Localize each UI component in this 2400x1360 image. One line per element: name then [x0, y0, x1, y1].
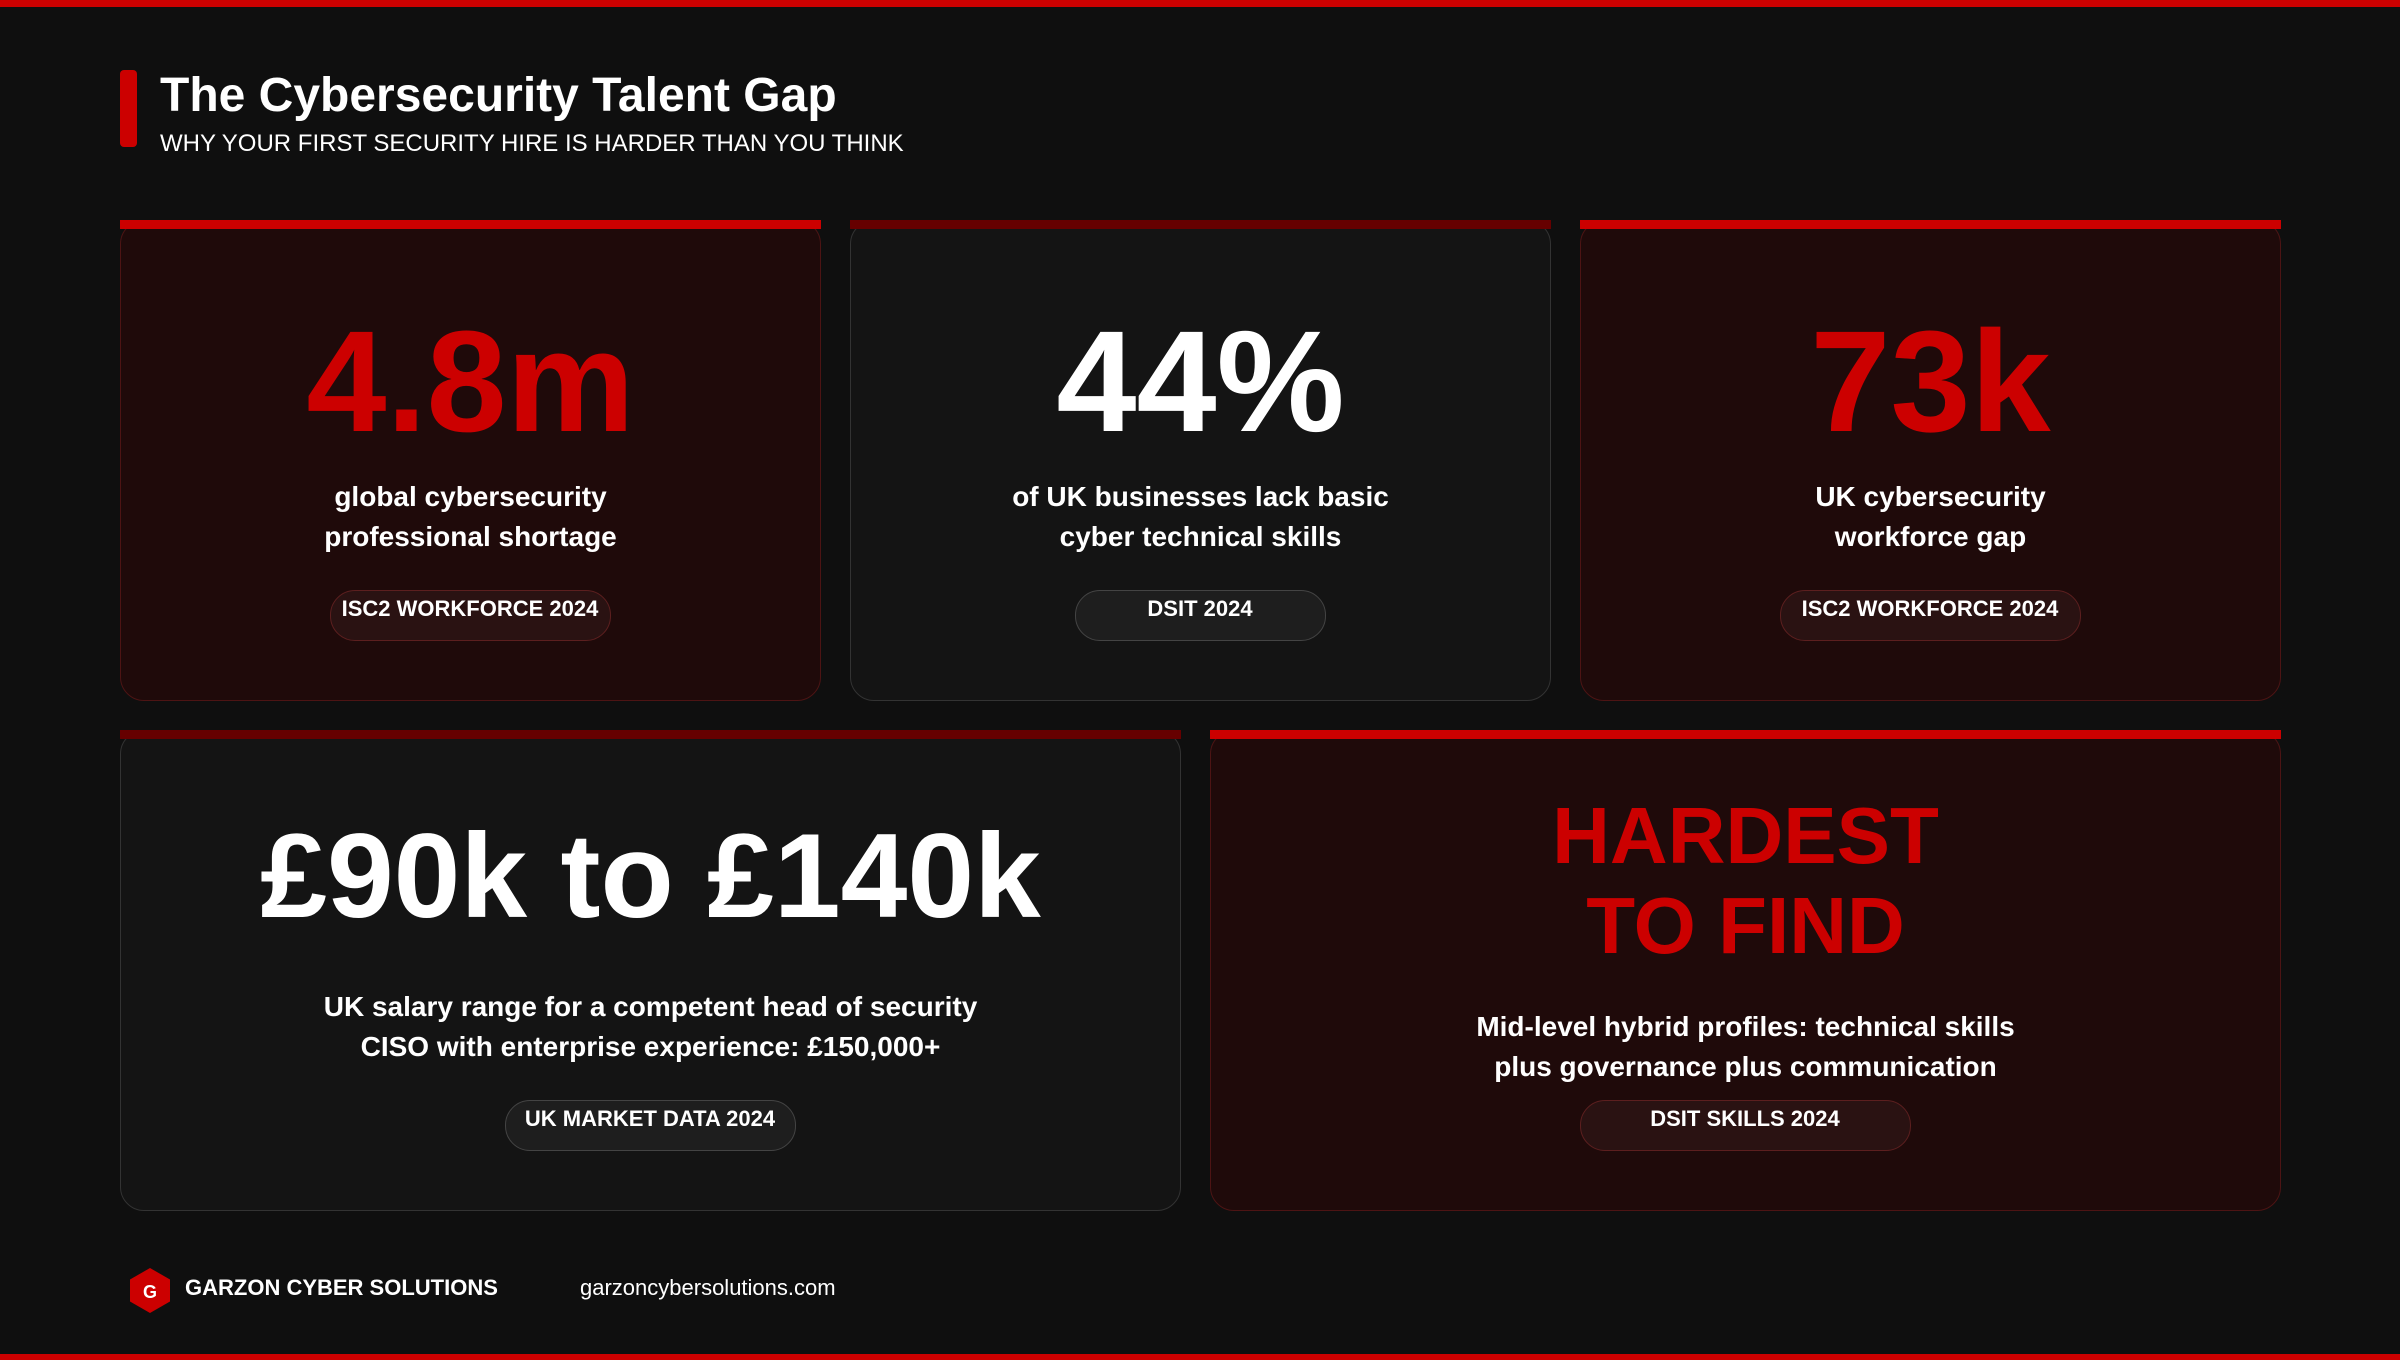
source pill — [1780, 590, 2081, 641]
description: professional shortage — [324, 521, 617, 552]
headline: HARDEST — [1552, 791, 1939, 880]
source pill — [1075, 590, 1326, 641]
panel: salary range — [120, 730, 1181, 1211]
title: The Cybersecurity Talent Gap — [160, 69, 837, 122]
description: global cybersecurity — [334, 481, 607, 512]
source pill: DSIT SKILLS 2024 — [1650, 1106, 1840, 1131]
headline — [1552, 791, 1939, 970]
panel: UK skills — [850, 220, 1551, 701]
panel top bar — [1580, 220, 2281, 229]
description: of UK businesses lack basic — [1012, 481, 1389, 512]
footer — [130, 1268, 836, 1313]
description: UK cybersecurity — [1815, 481, 2046, 512]
source pill: ISC2 WORKFORCE 2024 — [1802, 596, 2058, 621]
description — [324, 481, 617, 552]
icon: hexagon logo — [130, 1268, 170, 1313]
panel top bar — [1210, 730, 2281, 739]
panel top bar — [120, 220, 821, 229]
header — [120, 69, 904, 157]
stat: salary: £90k to £140k — [260, 809, 1041, 943]
panel: global shortage — [120, 220, 821, 701]
website: garzoncybersolutions.com — [580, 1275, 836, 1300]
description — [1012, 481, 1389, 552]
subtitle: WHY YOUR FIRST SECURITY HIRE IS HARDER THAN YOU THINK — [160, 130, 904, 157]
icon: hexagon logo: G — [143, 1282, 157, 1302]
description — [324, 991, 978, 1062]
description: CISO with enterprise experience: £150,000+ — [361, 1031, 940, 1062]
description — [1476, 1011, 2015, 1082]
header accent block — [120, 70, 137, 147]
description: plus governance plus communication — [1494, 1051, 1997, 1082]
description: Mid-level hybrid profiles: technical skills — [1476, 1011, 2015, 1042]
source pill: DSIT 2024 — [1147, 596, 1253, 621]
panel: hardest to find — [1210, 730, 2281, 1211]
source pill — [330, 590, 611, 641]
description: cyber technical skills — [1060, 521, 1341, 552]
headline: TO FIND — [1586, 881, 1905, 970]
description: UK salary range for a competent head of security — [324, 991, 977, 1022]
description — [1815, 481, 2046, 552]
panel: UK workforce gap — [1580, 220, 2281, 701]
source pill — [505, 1100, 796, 1151]
stat: 4.8m: 4.8m — [306, 301, 635, 462]
stat: 44%: 44% — [1056, 301, 1345, 462]
brand name: GARZON CYBER SOLUTIONS — [185, 1275, 498, 1300]
panel top bar — [120, 730, 1181, 739]
bottom accent bar — [0, 1354, 2400, 1360]
source pill — [1580, 1100, 1911, 1151]
source pill: ISC2 WORKFORCE 2024 — [342, 596, 598, 621]
stat: 73k: 73k — [1810, 301, 2051, 462]
panel top bar — [850, 220, 1551, 229]
description: workforce gap — [1835, 521, 2026, 552]
top accent bar — [0, 0, 2400, 7]
source pill: UK MARKET DATA 2024 — [525, 1106, 775, 1131]
